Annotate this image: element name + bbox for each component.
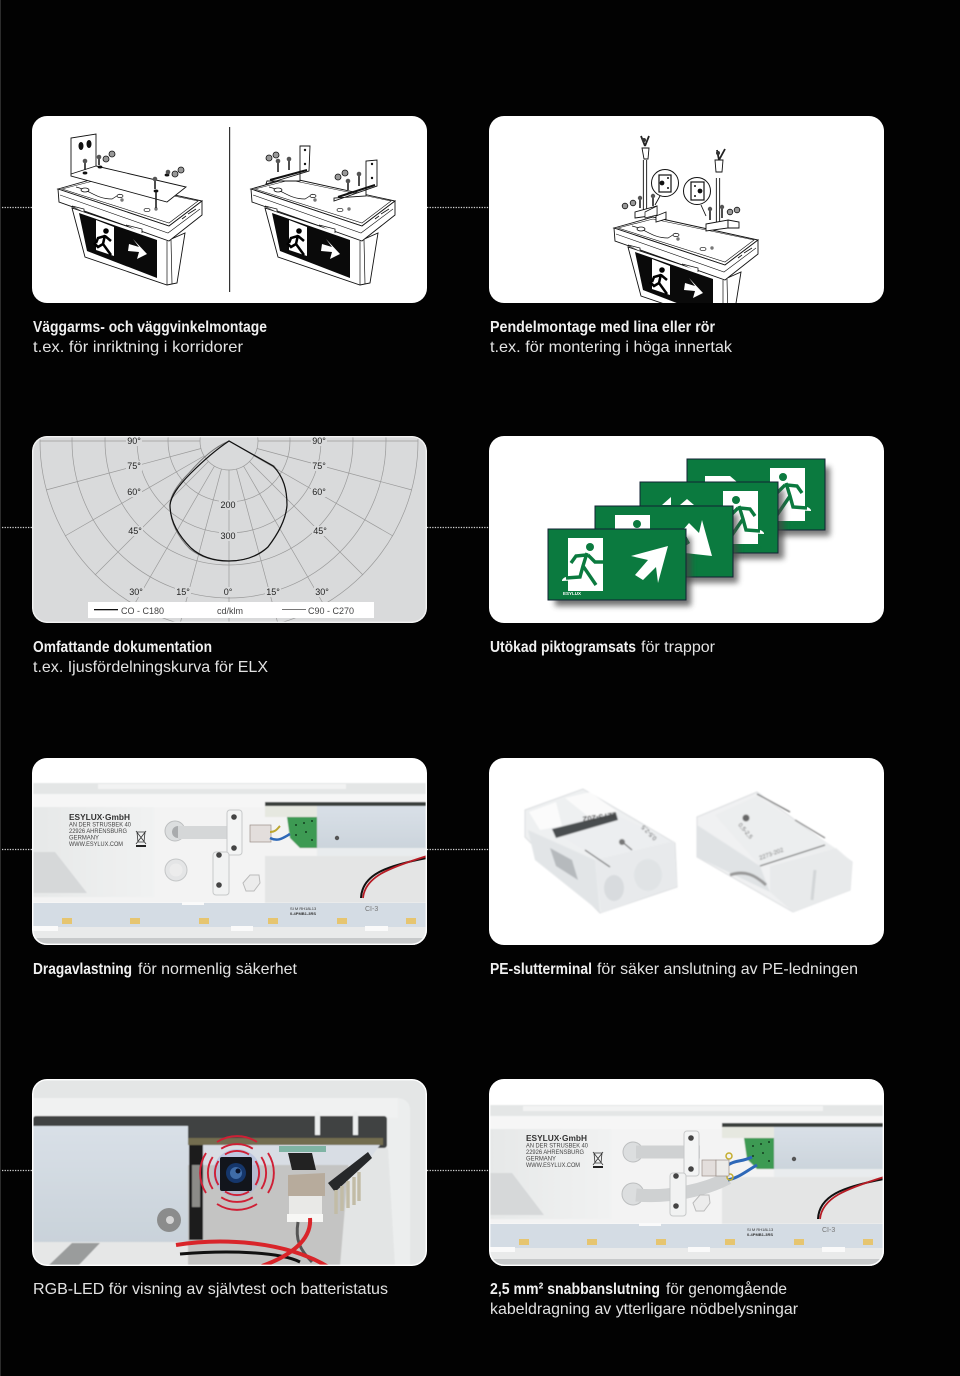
panel: light distribution curve [32, 436, 427, 623]
LED strip: 0-4PMB1-3RS [290, 911, 316, 916]
light distribution curves [170, 441, 287, 561]
caption: PE terminal: för säker anslutning av PE-ledningen [597, 961, 858, 978]
LED strip: SI M RH18L13 [747, 1227, 774, 1232]
icon: fixture with wall angles [251, 146, 395, 285]
connector and cables [176, 1173, 330, 1268]
caption: documentation [33, 639, 268, 676]
caption: wall mounting [33, 319, 267, 356]
caption: pictograms: Utökad piktogramsats [490, 639, 636, 656]
angle labels: 45° [313, 526, 327, 536]
caption: strain relief: Dragavlastning [33, 961, 132, 978]
legend: CO - C180 [121, 606, 164, 616]
board details and pin header [279, 1146, 372, 1214]
quick terminals [702, 1141, 770, 1176]
sign 3 [640, 482, 784, 559]
cable clamps [670, 1131, 699, 1216]
caption: strain relief [33, 961, 298, 978]
cables and grommets [622, 1142, 796, 1211]
icon: left connector: 2273-202 [582, 810, 617, 824]
sign 2 [595, 506, 738, 583]
caption: documentation: t.ex. Ijusfördelningskurva för ELX [33, 659, 268, 676]
caption: wall mounting: Väggarms- och väggvinkelmontage [33, 319, 267, 336]
screw [157, 1208, 181, 1232]
product label: WWW.ESYLUX.COM [526, 1162, 580, 1169]
angle labels: 15° [266, 587, 280, 597]
product label: 22926 AHRENSBURG [526, 1149, 584, 1156]
panel: extended pictogram set [489, 436, 884, 623]
product label: AN DER STRUSBEK 40 [69, 822, 132, 828]
angle labels: 0° [224, 587, 233, 597]
caption: PE terminal: PE-slutterminal [490, 961, 592, 978]
LED strip: SI M RH18L13 [290, 906, 317, 911]
icon: right connector: 2273-202 [759, 847, 785, 862]
angle labels: 300 [220, 531, 236, 541]
legend: cd/klm [217, 606, 243, 616]
icon: left connector: 0,5-2,5 [640, 823, 658, 841]
icon: right connector [697, 792, 852, 912]
panel: quick connection photo [489, 1079, 884, 1266]
angle labels: 60° [127, 487, 141, 497]
caption: strain relief: för normenlig säkerhet [138, 961, 298, 978]
LED strip: 0-4PMB1-3RS [747, 1232, 773, 1237]
panel: RGB LED photo [32, 1079, 427, 1268]
angle labels [126, 436, 330, 597]
angle labels: 75° [127, 461, 141, 471]
icon: left connector [525, 789, 677, 913]
product label: GERMANY [526, 1156, 556, 1162]
product label: WWW.ESYLUX.COM [69, 841, 123, 848]
caption: pendant mounting: Pendelmontage med lina eller rör [490, 319, 715, 336]
caption: documentation: Omfattande dokumentation [33, 639, 212, 656]
LED strip [490, 1223, 884, 1266]
legend: C90 - C270 [308, 606, 354, 616]
panel: wall arm and wall angle mounting [32, 116, 427, 303]
product label [526, 1133, 603, 1169]
product label: AN DER STRUSBEK 40 [526, 1142, 589, 1150]
sign 3: ESYLUX [744, 545, 762, 550]
angle labels: 75° [312, 461, 326, 471]
product label: GERMANY [69, 834, 99, 842]
caption: quick connection [490, 1280, 799, 1318]
product label [69, 812, 146, 848]
divider line [229, 127, 230, 292]
icon: RGB LED with signal arcs [200, 1136, 274, 1210]
caption: wall mounting: t.ex. för inriktning i korridorer [33, 339, 244, 356]
icon: pendant fixture [614, 136, 758, 324]
LED strip: CI-3 [365, 906, 378, 913]
panel: pendant mounting [489, 116, 884, 303]
caption: pendant mounting [490, 319, 733, 356]
angle labels: 60° [312, 487, 326, 497]
polar grid [40, 437, 418, 622]
caption: pictograms: för trappor [641, 639, 716, 656]
LED strip: CI-3 [822, 1227, 835, 1234]
product label: ESYLUX·GmbH [69, 812, 130, 822]
sign 4 [687, 459, 830, 536]
caption: pendant mounting: t.ex. för montering i höga innertak [490, 339, 733, 356]
sign 1: ESYLUX [563, 591, 581, 596]
LED strip [33, 902, 427, 945]
red and black cable [361, 856, 427, 898]
sign 1 [548, 529, 691, 606]
icon: right connector: 0,5-2,5 [736, 822, 753, 841]
product label: 22926 AHRENSBURG [69, 828, 127, 835]
angle labels: 200 [220, 500, 236, 510]
panel: PE terminal photo [489, 758, 884, 945]
caption: quick connection: 2,5 mm² snabbanslutning [490, 1281, 660, 1298]
angle labels: 30° [315, 587, 329, 597]
panel: strain relief photo [32, 758, 427, 945]
angle labels: 90° [312, 436, 326, 446]
angle labels: 90° [127, 436, 141, 446]
red and black cable [818, 1177, 884, 1219]
sign 4: ESYLUX [790, 522, 808, 527]
terminal and wires [250, 820, 313, 842]
caption: quick connection: för genomgående [666, 1280, 787, 1298]
angle labels: 15° [176, 587, 190, 597]
fixture bracket details [164, 820, 340, 892]
caption: quick connection: kabeldragning av ytterligare nödbelysningar [490, 1301, 799, 1318]
cable clamps [213, 810, 242, 895]
product label: ESYLUX·GmbH [526, 1133, 587, 1143]
caption: RGB LED: RGB-LED för visning av självtest och batteristatus [33, 1281, 388, 1298]
icon: fixture with wall arm [58, 134, 202, 285]
angle labels: 30° [129, 587, 143, 597]
angle labels: 45° [128, 526, 142, 536]
legend [88, 602, 374, 618]
